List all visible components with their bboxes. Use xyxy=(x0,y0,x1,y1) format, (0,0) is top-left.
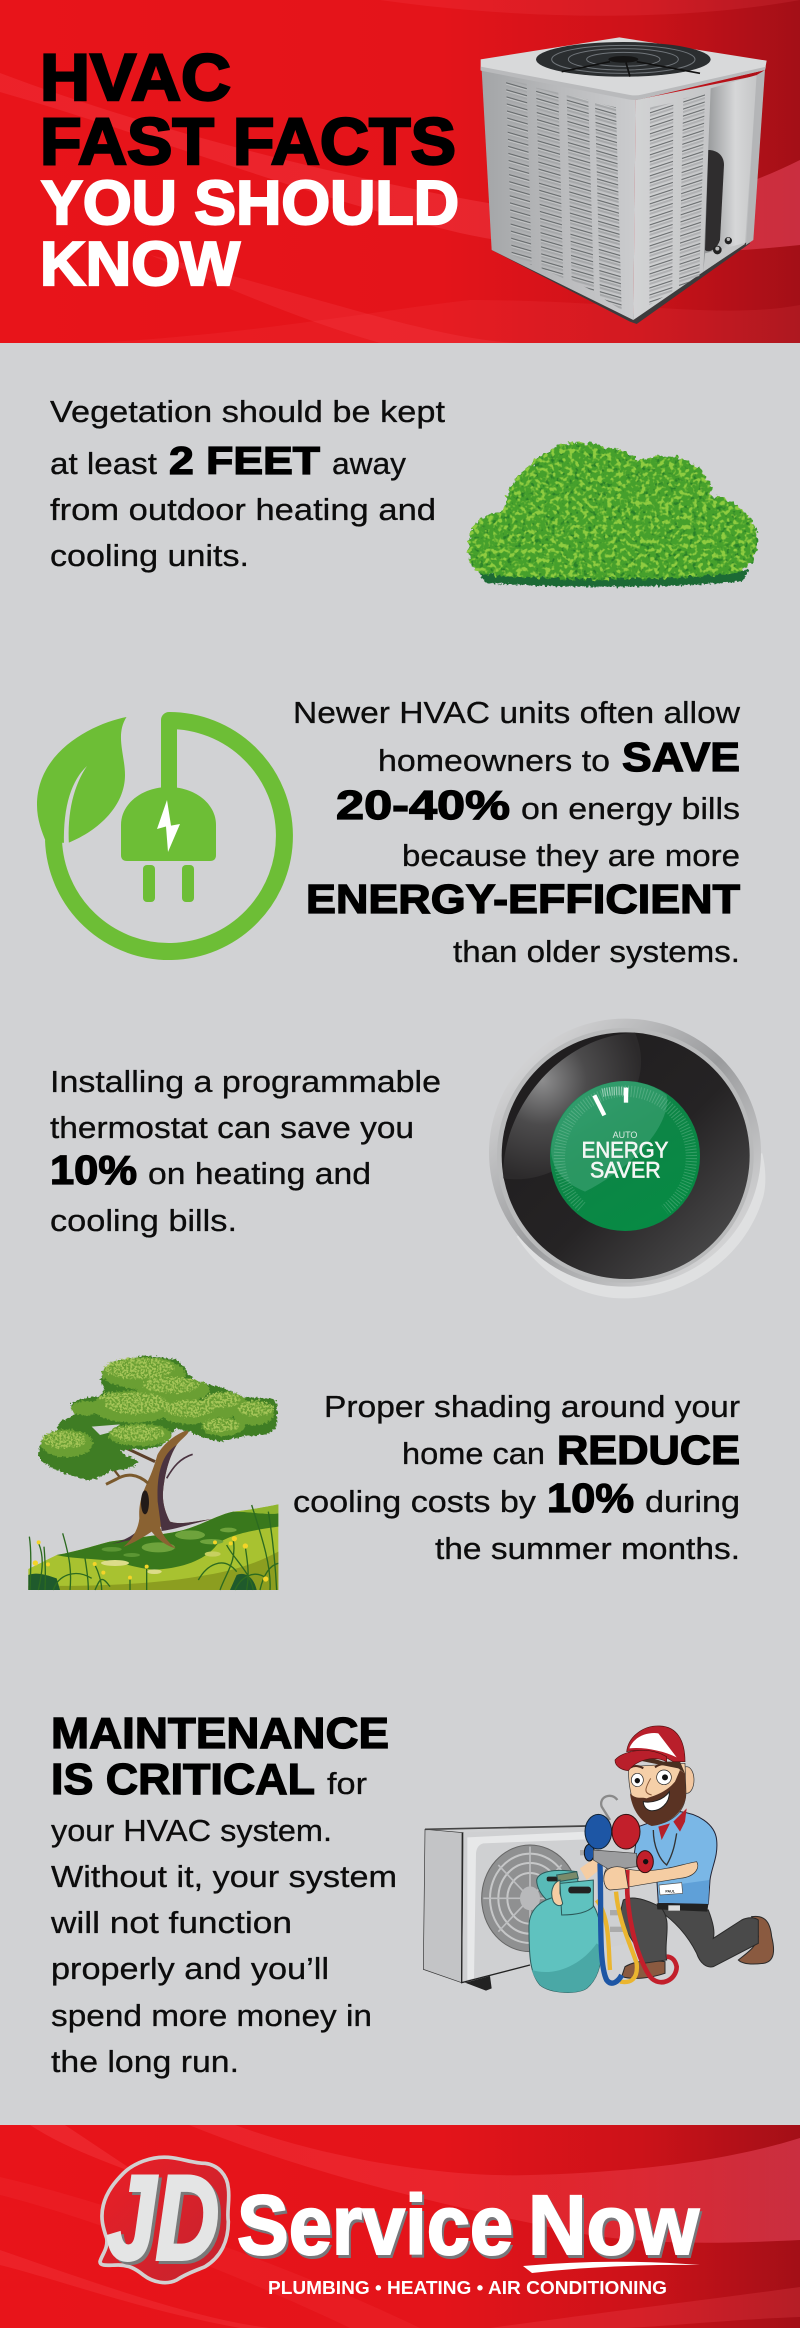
logo: JD badge: JD xyxy=(107,2151,219,2285)
illustration: tree on a hill xyxy=(28,1356,278,1590)
icon: green leaf plug in a ring xyxy=(37,717,284,952)
canopy highlights xyxy=(43,1358,275,1449)
louvers: right face xyxy=(649,94,705,305)
tagline: PLUMBING • HEATING • AIR CONDITIONING xyxy=(268,2278,667,2298)
text block: vegetation fact: cooling units. xyxy=(50,538,249,573)
grass and flowers xyxy=(28,1505,278,1590)
thermostat label: ENERGY xyxy=(582,1138,669,1163)
text block: maintenance fact: will not function xyxy=(50,1905,292,1940)
text block: thermostat fact: cooling bills. xyxy=(50,1203,237,1238)
text block: shading fact: during xyxy=(645,1484,740,1519)
text block: thermostat fact: on heating and xyxy=(148,1156,371,1191)
text block: shading fact: REDUCE xyxy=(557,1427,740,1473)
lightning bolt xyxy=(157,800,180,852)
outdoor unit xyxy=(423,1826,628,1991)
dial ticks xyxy=(559,1088,691,1210)
icon: outdoor AC condenser unit xyxy=(481,37,767,324)
text block: energy savings fact: ENERGY-EFFICIENT xyxy=(306,876,740,922)
text block: energy savings fact: on energy bills xyxy=(521,791,740,826)
text block: maintenance fact: your HVAC system. xyxy=(51,1813,332,1848)
text block: thermostat fact xyxy=(50,1064,441,1238)
unit fan xyxy=(482,1845,578,1952)
text block: thermostat fact: 10% xyxy=(50,1147,137,1193)
logo: company name: Now xyxy=(530,2181,702,2275)
text block: vegetation fact: 2 FEET xyxy=(169,440,320,483)
technician torso xyxy=(580,1808,717,1912)
text block: energy savings fact: than older systems. xyxy=(453,934,740,969)
text block: thermostat fact: Installing a programmable xyxy=(50,1064,441,1099)
open service panel with compressor xyxy=(703,75,757,272)
text block: thermostat fact: thermostat can save you xyxy=(50,1110,414,1145)
plug xyxy=(121,787,216,861)
text block: vegetation fact: away xyxy=(332,446,407,481)
title: HVAC xyxy=(40,40,231,114)
canopy mid tones xyxy=(41,1357,274,1457)
logo: company name: Service xyxy=(237,2178,513,2272)
title xyxy=(40,40,459,299)
title: FAST FACTS xyxy=(40,104,456,178)
fan grille xyxy=(536,42,711,77)
text block: shading fact: Proper shading around your xyxy=(324,1389,740,1424)
dial glass sheen xyxy=(503,1033,641,1179)
text block: vegetation fact: at least xyxy=(50,446,157,481)
title: KNOW xyxy=(40,230,240,299)
text block: energy savings fact: homeowners to xyxy=(378,743,610,778)
trunk xyxy=(106,1429,212,1548)
manifold gauges and hoses xyxy=(584,1796,677,1983)
thermostat label xyxy=(582,1130,669,1183)
text block: energy savings fact: SAVE xyxy=(622,734,740,780)
text block: vegetation fact xyxy=(50,394,445,573)
unit lid xyxy=(481,37,767,99)
text block: maintenance fact: the long run. xyxy=(51,2044,239,2079)
text block: maintenance fact: Without it, your system xyxy=(51,1859,397,1894)
text block: shading fact: 10% xyxy=(547,1475,634,1521)
logo: JD badge: JD xyxy=(110,2154,222,2288)
text block: energy savings fact: Newer HVAC units often allow xyxy=(293,695,741,730)
icon: energy saver thermostat xyxy=(489,1019,765,1298)
text block: shading fact: the summer months. xyxy=(435,1531,740,1566)
icon: green bush xyxy=(468,443,757,587)
panel: header banner xyxy=(0,0,800,343)
text block: maintenance fact: IS CRITICAL xyxy=(51,1755,315,1804)
title: YOU SHOULD xyxy=(41,169,459,238)
ring and cord xyxy=(54,720,284,952)
panel: footer banner xyxy=(0,2125,800,2328)
logo: company name xyxy=(237,2178,702,2275)
louvers: left face xyxy=(506,79,622,310)
text block: maintenance fact: for xyxy=(327,1766,367,1801)
text block: maintenance fact: MAINTENANCE xyxy=(51,1709,389,1758)
thermostat label: SAVER xyxy=(590,1158,661,1183)
text block: shading fact xyxy=(293,1389,740,1566)
canopy xyxy=(38,1356,277,1480)
text block: energy savings fact: because they are more xyxy=(402,838,740,873)
thermostat label: AUTO xyxy=(613,1130,637,1140)
text block: energy savings fact: 20-40% xyxy=(336,782,510,828)
illustration: technician servicing outdoor unit xyxy=(423,1726,774,1992)
text block: shading fact: cooling costs by xyxy=(293,1484,537,1519)
text block: energy savings fact xyxy=(293,695,741,969)
technician torso: PAUL xyxy=(665,1889,676,1893)
logo: company name: Now xyxy=(528,2178,700,2272)
text block: maintenance fact: spend more money in xyxy=(51,1998,372,2033)
logo: company name: Service xyxy=(239,2181,515,2275)
technician legs and boots xyxy=(620,1898,774,1978)
text block: shading fact: home can xyxy=(402,1436,545,1471)
text block: vegetation fact: from outdoor heating and xyxy=(50,492,436,527)
hill xyxy=(28,1504,278,1590)
text block: vegetation fact: Vegetation should be kept xyxy=(50,394,445,429)
text block: maintenance fact xyxy=(50,1709,397,2079)
leaf xyxy=(37,717,126,843)
text block: maintenance fact: properly and you’ll xyxy=(51,1951,329,1986)
technician head and cap xyxy=(615,1726,694,1826)
refrigerant tank xyxy=(529,1870,602,1992)
